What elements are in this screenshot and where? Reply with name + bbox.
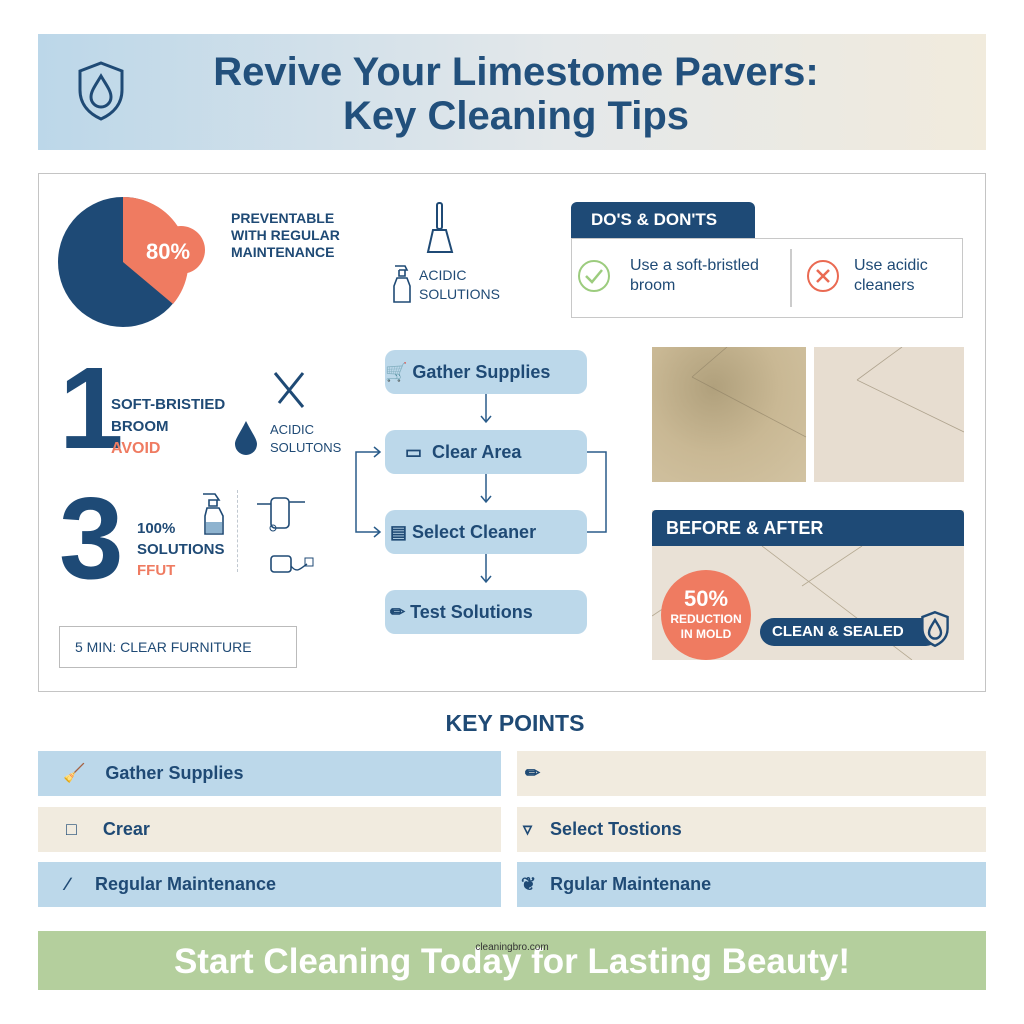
text: preventable: WITH REGULAR: [231, 227, 340, 243]
footer call to action: cleaningbro.com: [475, 942, 549, 953]
text: ❦ Rgular Maintenane: [521, 874, 711, 894]
step: test: ✏ Test Solutions: [390, 602, 533, 622]
stat: 50%: IN MOLD: [681, 627, 731, 641]
title text: Key Cleaning Tips: [343, 94, 689, 138]
key points rows: [38, 751, 501, 796]
badge: clean & sealed: [760, 618, 940, 646]
step: gather: [385, 350, 587, 394]
footer call to action: Start Cleaning Today for Lasting Beauty!: [174, 942, 850, 981]
stat: 3 100% solutions: SOLUTIONS: [137, 541, 225, 558]
dos and donts: DO'S & DON'TS: [591, 210, 717, 229]
panel: before & after: BEFORE & AFTER: [666, 518, 823, 538]
icon: broom and spray with acidic solutions: SOLUTIONS: [419, 286, 500, 302]
stat: 1 soft-bristled broom: [59, 343, 225, 473]
title banner: [38, 34, 986, 150]
icon: shield: [921, 610, 949, 648]
pie chart 80%: [58, 197, 205, 327]
photos: before and after tiles: [652, 347, 964, 482]
stat: 3 100% solutions: FFUT: [137, 562, 175, 579]
icon: crossed broom and drop: SOLUTONS: [270, 440, 341, 455]
text: ∕ Regular Maintenance: [66, 874, 276, 894]
icon: shield drop: [78, 61, 124, 121]
icon: crossed broom and drop: ACIDIC: [270, 422, 314, 437]
title text: [213, 50, 819, 138]
panel: before & after: [652, 510, 964, 660]
step: gather: 🛒 Gather Supplies: [385, 362, 550, 382]
badge: clean & sealed: CLEAN & SEALED: [772, 623, 904, 640]
step: clear: [385, 430, 587, 474]
text: ✏: [525, 763, 540, 783]
stat: 3 100% solutions: [59, 473, 314, 603]
footer call to action: [38, 931, 986, 990]
stat: 50%: 50%: [684, 586, 728, 611]
stat: 1 soft-bristled broom: SOFT-BRISTIED: [111, 396, 225, 413]
key points heading: KEY POINTS: [446, 710, 584, 736]
icon: broom and spray with acidic solutions: [393, 202, 500, 303]
step: clear: ▭ Clear Area: [405, 442, 521, 462]
stat: 3 100% solutions: 3: [59, 473, 124, 603]
flowchart: [355, 350, 607, 634]
icon: crossed broom and drop: [235, 372, 341, 455]
icon: check: [578, 260, 610, 292]
stat: 1 soft-bristled broom: BROOM: [111, 418, 168, 435]
text: □ Crear: [66, 819, 150, 839]
text: preventable: PREVENTABLE: [231, 210, 334, 226]
text: preventable: MAINTENANCE: [231, 244, 334, 260]
step: select: ▤ Select Cleaner: [390, 522, 536, 542]
stat: 50%: [661, 570, 751, 660]
dos and donts: [571, 202, 963, 318]
dos and donts: cleaners: [854, 277, 914, 294]
step: select: [385, 510, 587, 554]
dos and donts: broom: [630, 277, 675, 294]
stat: 3 100% solutions: 100%: [137, 520, 175, 537]
main panel: [38, 173, 986, 692]
dos and donts: Use a soft-bristled: [630, 257, 759, 274]
icon: broom and spray with acidic solutions: ACIDIC: [419, 267, 466, 283]
key points rows: 🧹 Gather Supplies: [63, 763, 243, 783]
text: preventable: [231, 210, 340, 260]
stat: 50%: REDUCTION: [670, 612, 742, 626]
icon: cross: [807, 260, 839, 292]
dos and donts: Use acidic: [854, 257, 928, 274]
pie chart 80%: 80%: [146, 239, 190, 264]
callout: 5 min: [59, 626, 297, 668]
step: test: [385, 590, 587, 634]
arrows: [355, 394, 607, 583]
text: ▿ Select Tostions: [523, 819, 682, 839]
stat: 1 soft-bristled broom: 1: [59, 343, 124, 473]
title text: Revive Your Limestome Pavers:: [213, 50, 819, 94]
callout: 5 min: 5 MIN: CLEAR FURNITURE: [75, 639, 252, 655]
stat: 1 soft-bristled broom: AVOID: [111, 440, 160, 457]
